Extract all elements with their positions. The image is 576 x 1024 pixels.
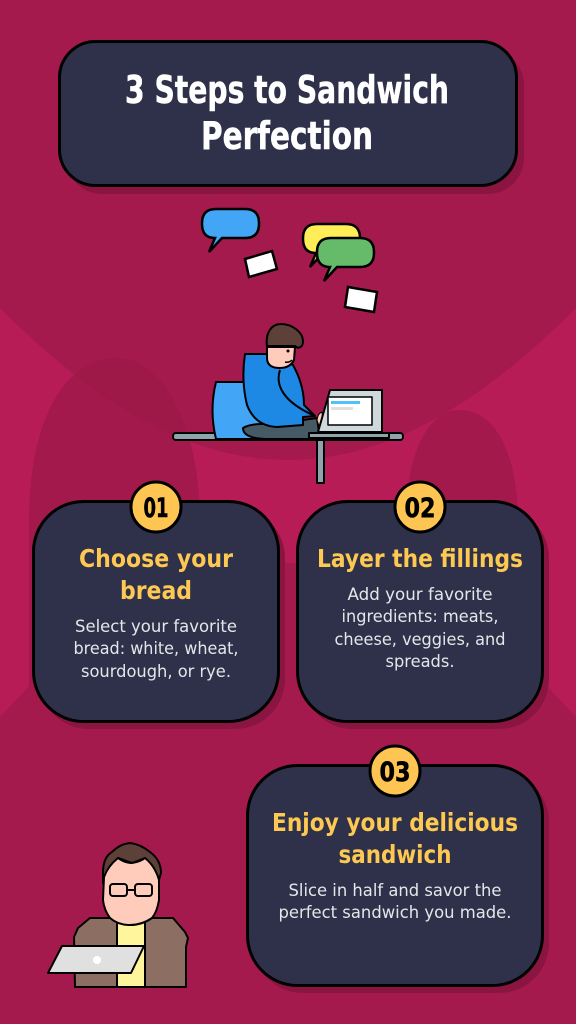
icon: yellow speech bubble (303, 224, 360, 267)
title panel (60, 42, 524, 194)
laptop (318, 390, 382, 432)
heading: Perfection (201, 114, 373, 158)
hair (267, 324, 303, 348)
icon: paper note right (345, 287, 377, 312)
desk top (173, 433, 403, 440)
card 2 heading: Layer the fillings (317, 544, 523, 573)
number badge 03 (370, 746, 420, 796)
arm (279, 370, 315, 416)
card 2 body: ingredients: meats, (342, 607, 498, 626)
number badge 01: 01 (144, 493, 168, 524)
heading (125, 68, 449, 158)
hair (103, 843, 161, 883)
icon: blue speech bubble (202, 209, 259, 252)
card 3 body: perfect sandwich you made. (278, 903, 512, 922)
chair (212, 382, 265, 439)
card 1 heading: bread (120, 576, 192, 605)
illustration: person at desk with laptop (173, 324, 403, 483)
jacket (74, 918, 188, 987)
card 3 body: Slice in half and savor the (288, 881, 502, 900)
number badge 02 (395, 482, 445, 532)
card 2 body: cheese, veggies, and (334, 630, 506, 649)
torso (243, 354, 315, 427)
face (267, 347, 295, 368)
icon: green speech bubble (317, 238, 374, 281)
number badge 01 (131, 482, 181, 532)
step card 1 (34, 482, 285, 729)
icon: paper note left (245, 251, 277, 277)
legs (243, 418, 320, 439)
glasses (110, 884, 152, 896)
illustration: man with glasses and laptop (48, 843, 188, 987)
card 3 heading: sandwich (338, 840, 452, 869)
laptop (48, 946, 144, 973)
shirt (117, 922, 145, 987)
step card 3 (248, 746, 549, 993)
face (103, 858, 159, 925)
step card 2 (298, 482, 549, 729)
card 2 body: Add your favorite (348, 585, 492, 604)
hand (317, 412, 323, 426)
card 1 body: sourdough, or rye. (81, 662, 231, 681)
card 1 body: bread: white, wheat, (74, 639, 238, 658)
card 3 heading: Enjoy your delicious (272, 808, 518, 837)
number badge 02: 02 (404, 493, 436, 524)
heading: 3 Steps to Sandwich (125, 68, 449, 112)
number badge 03: 03 (380, 757, 410, 788)
card 1 body: Select your favorite (75, 617, 237, 636)
card 2 body: spreads. (386, 652, 454, 671)
desk leg (317, 439, 324, 483)
card 1 heading: Choose your (79, 544, 234, 573)
